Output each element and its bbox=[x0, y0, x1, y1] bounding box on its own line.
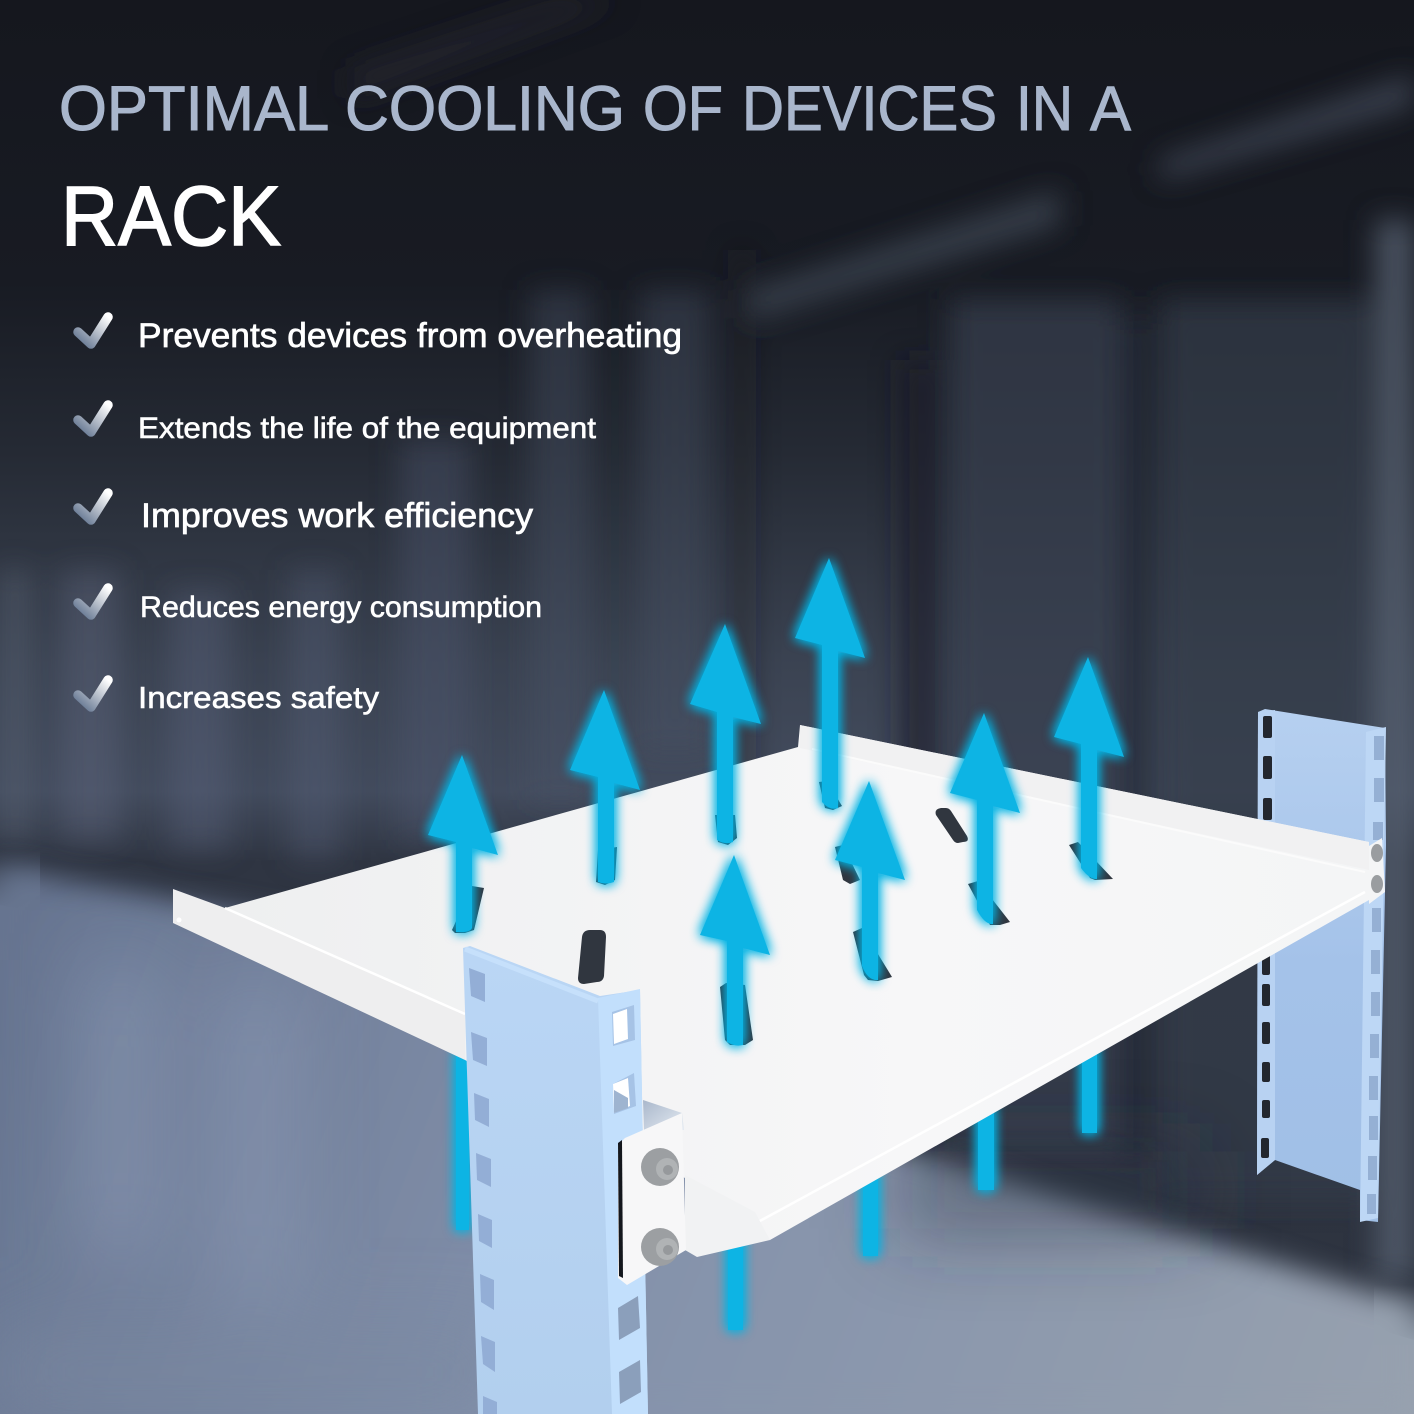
title line: COOLING bbox=[345, 74, 625, 144]
arrow 2 bbox=[570, 690, 640, 884]
shelf underside tab bbox=[685, 1175, 770, 1257]
ventilation slots bbox=[452, 781, 1113, 1045]
arrow 3 bbox=[690, 624, 761, 843]
title line: OF bbox=[643, 74, 723, 144]
airflow shafts beneath shelf bbox=[456, 1045, 1097, 1330]
list item: increases safety: Increases safety bbox=[138, 680, 380, 715]
arrow 7 bbox=[835, 781, 905, 980]
bolt lower bbox=[641, 1228, 679, 1266]
front edge lip bbox=[758, 892, 1365, 1222]
mounting bracket with bolts bbox=[618, 838, 1385, 1285]
title line: DEVICES bbox=[742, 74, 997, 144]
back flange crease bbox=[800, 725, 1369, 870]
title line: OPTIMAL bbox=[59, 74, 327, 144]
arrow 8 bbox=[700, 855, 770, 1046]
benefit list bbox=[78, 317, 682, 715]
bolt upper bbox=[641, 1148, 679, 1186]
title line: A bbox=[1090, 74, 1131, 144]
arrow 1 bbox=[428, 755, 498, 932]
list item: prevents overheating: Prevents devices from overheating bbox=[138, 317, 682, 355]
list item: extends life bbox=[78, 405, 597, 445]
list item: energy consumption: Reduces energy consumption bbox=[140, 591, 542, 624]
list item: work efficiency: Improves work efficiency bbox=[141, 497, 533, 535]
arrow 5 bbox=[1054, 657, 1124, 879]
arrow 4 bbox=[795, 558, 865, 809]
left side flange bbox=[173, 889, 465, 1060]
title emphasis: RACK bbox=[61, 169, 281, 263]
upward airflow arrows bbox=[428, 558, 1124, 1046]
arrow 6 bbox=[950, 713, 1020, 924]
front rack post bbox=[463, 946, 648, 1414]
right bracket with bolts bbox=[1369, 838, 1385, 904]
title line: IN bbox=[1016, 74, 1073, 144]
right rack post bbox=[1257, 709, 1386, 1222]
list item: extends life: Extends the life of the equipment bbox=[138, 412, 597, 445]
white perforated shelf bbox=[173, 725, 1369, 1240]
